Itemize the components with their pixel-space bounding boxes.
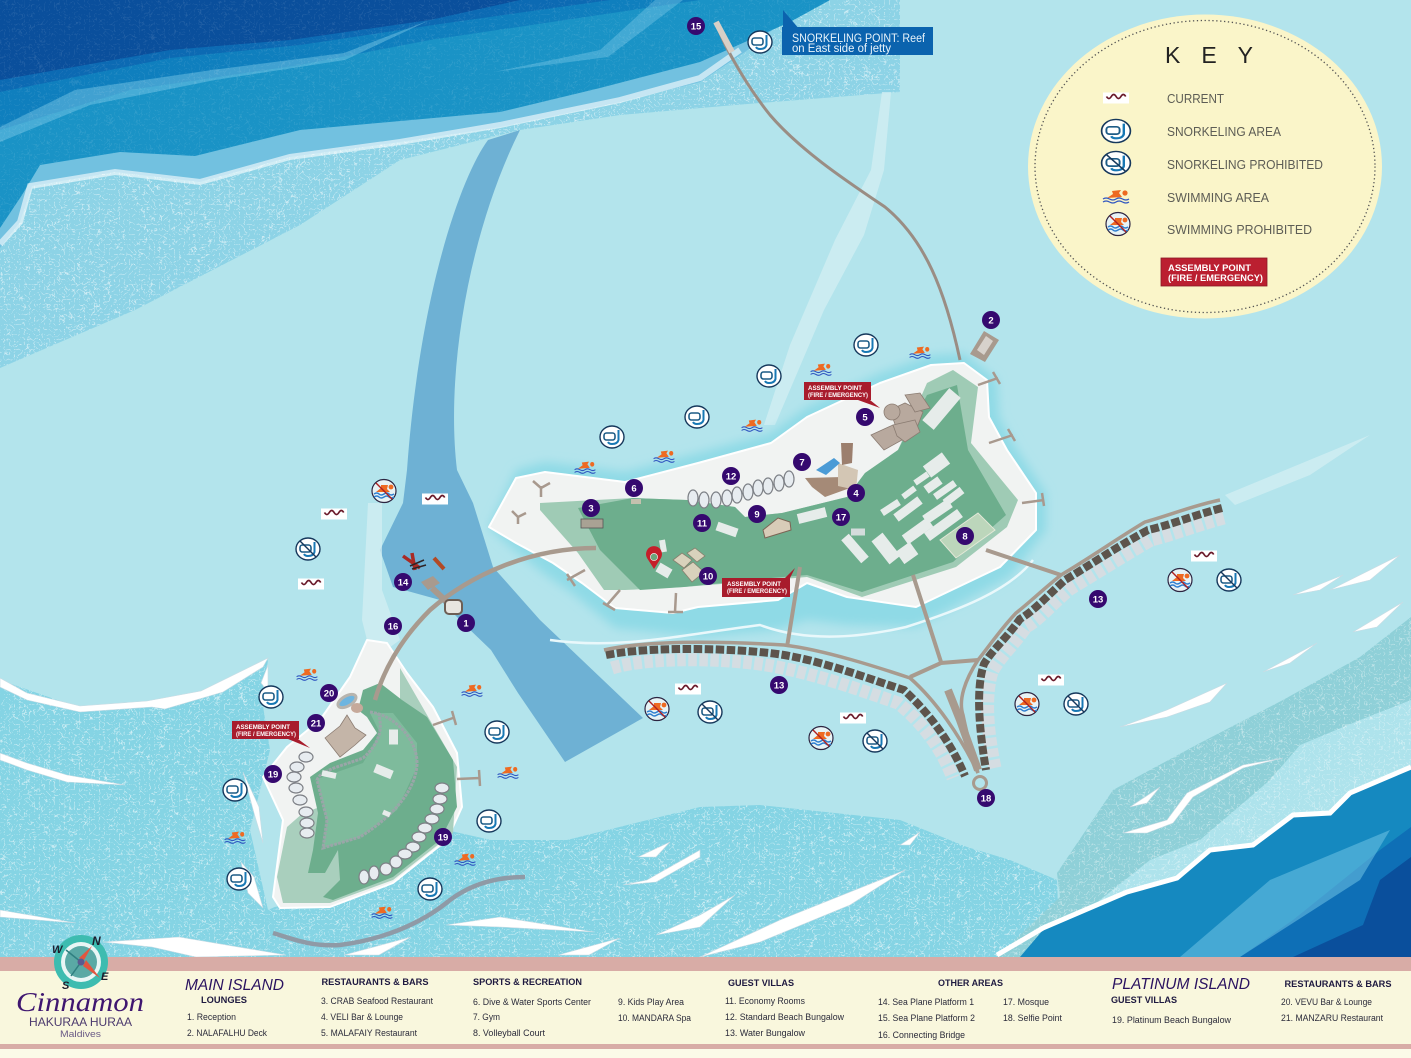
key: snorkeling prohibited: SNORKELING PROHIBITED: [1167, 157, 1323, 172]
numbered markers: [264, 17, 1107, 846]
walkways: [604, 500, 1220, 773]
garden pathway: [317, 712, 417, 848]
shallow halo around main island: [489, 353, 1046, 637]
logo: HAKURAA HURAA: [29, 1015, 132, 1029]
reef: north-west shallows: [0, 0, 900, 368]
column: guest villas: GUEST VILLAS: [728, 978, 794, 989]
key: swimming prohibited: SWIMMING PROHIBITED: [1167, 222, 1312, 237]
compass: E: [101, 971, 109, 983]
pale sand bars: [362, 92, 1370, 660]
reef: south-east shallows: [997, 617, 1411, 957]
column: other areas: 17. Mosque: [1003, 997, 1049, 1007]
column: platinum island: 19. Platinum Beach Bungalow: [1112, 1015, 1231, 1025]
water bungalows and walkways: [604, 500, 1224, 790]
numbered markers: 15: [691, 22, 702, 32]
assembly point: north: [804, 382, 880, 408]
key: current: CURRENT: [1167, 91, 1224, 106]
assembly point: south: (FIRE / EMERGENCY): [727, 588, 787, 595]
restaurant 5 buildings: [871, 393, 930, 450]
column: platinum island: [1111, 976, 1250, 1025]
platinum bungalows: [287, 752, 449, 884]
key: assembly point: [1161, 258, 1267, 286]
numbered markers: 3: [588, 504, 594, 514]
gym building: [763, 518, 791, 538]
long jetty to seaplane platform 2: [716, 22, 960, 360]
small jetties on main island: [512, 372, 1044, 612]
west island sand: [263, 640, 462, 908]
numbered markers: 10: [703, 572, 713, 582]
column: guest villas: 13. Water Bungalow: [725, 1028, 805, 1038]
numbered markers: 8: [962, 532, 968, 542]
column: guest villas: [725, 978, 844, 1038]
selfie point ring: [974, 776, 986, 790]
west island blocks: [322, 737, 398, 815]
west island inner garden: [317, 713, 417, 848]
column: other areas: 18. Selfie Point: [1003, 1013, 1062, 1023]
numbered markers: 13: [1093, 594, 1103, 606]
column: sports and recreation: 9. Kids Play Area: [618, 997, 684, 1007]
snorkeling point callout: SNORKELING POINT: Reef: [792, 33, 926, 45]
column: sports and recreation: SPORTS & RECREATION: [473, 977, 582, 988]
column: main island lounges: 1. Reception: [187, 1012, 236, 1022]
key: assembly point: (FIRE / EMERGENCY): [1168, 273, 1263, 284]
key: snorkeling area: [1102, 119, 1281, 143]
restaurant 4 and 7 buildings: [805, 443, 858, 497]
assembly point: west island: (FIRE / EMERGENCY): [236, 731, 296, 738]
numbered markers: 1: [463, 618, 469, 630]
numbered markers: 19: [438, 832, 448, 844]
numbered markers: 14: [398, 578, 409, 588]
snorkeling prohibited icons: [296, 538, 1241, 752]
assembly point: north: ASSEMBLY POINT: [808, 385, 862, 392]
column: main island lounges: LOUNGES: [201, 995, 247, 1006]
numbered markers: 18: [981, 794, 991, 804]
main island: [489, 363, 1036, 613]
spa buildings: [673, 548, 705, 582]
white wave crests: [0, 555, 1403, 957]
west island pale vegetation: [277, 668, 457, 903]
assembly point: west island: [232, 721, 310, 748]
main island dark vegetation: [578, 385, 1006, 592]
key: assembly point: ASSEMBLY POINT: [1168, 263, 1251, 274]
numbered markers: 12: [726, 472, 736, 482]
compass: S: [62, 980, 70, 992]
main island sand: [489, 363, 1036, 613]
column: guest villas: 11. Economy Rooms: [725, 996, 805, 1006]
numbered markers: 20: [324, 688, 334, 700]
column: restaurants and bars: 3. CRAB Seafood Restaurant: [321, 996, 433, 1006]
nalafalhu deck: [970, 331, 999, 362]
column: other areas: OTHER AREAS: [938, 978, 1003, 989]
deep water: south-east: [997, 767, 1411, 957]
numbered markers: 19: [268, 770, 278, 780]
footer legend panel: [0, 957, 1411, 1058]
deep water: north-west: [0, 0, 830, 248]
snorkeling point callout: [782, 10, 933, 55]
compass: N: [92, 934, 101, 948]
breakwater: [273, 877, 525, 945]
reception and seaplane platform: [421, 576, 462, 614]
key: swimming area: SWIMMING AREA: [1167, 190, 1269, 205]
numbered markers: 4: [853, 488, 859, 500]
assembly point: south: [722, 568, 795, 597]
key: swimming area: [1103, 190, 1269, 205]
key: current: [1103, 91, 1224, 106]
column: restaurants and bars: RESTAURANTS & BARS: [322, 977, 428, 988]
numbered markers: 21: [311, 718, 322, 730]
staff and villa blocks: [658, 393, 962, 574]
column: main island lounges: MAIN ISLAND: [185, 977, 284, 994]
logo: Maldives: [60, 1029, 101, 1040]
manzaru restaurant: [325, 692, 366, 757]
numbered markers: 13: [774, 680, 784, 692]
column: other areas: 14. Sea Plane Platform 1: [878, 997, 974, 1007]
map pin: [646, 546, 662, 569]
reef: south shallows: [0, 660, 1060, 957]
column: other areas: 16. Connecting Bridge: [878, 1030, 965, 1040]
numbered markers: 9: [754, 510, 760, 520]
column: platinum restaurants and bars: 21. MANZARU Restaurant: [1281, 1013, 1383, 1023]
lagoon wave line: [550, 560, 1033, 643]
numbered markers: 5: [862, 412, 868, 424]
column: platinum restaurants and bars: RESTAURANTS & BARS: [1284, 979, 1392, 990]
column: main island lounges: 2. NALAFALHU Deck: [187, 1028, 267, 1038]
column: restaurants and bars: 5. MALAFAIY Restaurant: [321, 1028, 417, 1038]
column: platinum island: PLATINUM ISLAND: [1112, 976, 1250, 993]
swimming icons: [225, 347, 930, 918]
column: restaurants and bars: 4. VELI Bar & Lounge: [321, 1012, 403, 1022]
numbered markers: 7: [799, 458, 805, 468]
bungalow rows: south arc: [606, 649, 965, 778]
seaplane and boat: [403, 553, 444, 570]
compass: [52, 934, 109, 992]
snorkeling point callout: on East side of jetty: [792, 43, 891, 55]
column: sports and recreation: [473, 977, 691, 1038]
compass: W: [52, 944, 64, 956]
numbered markers: 16: [388, 622, 398, 632]
column: platinum restaurants and bars: 20. VEVU Bar & Lounge: [1281, 997, 1372, 1007]
current icons: [298, 494, 1217, 724]
column: sports and recreation: 7. Gym: [473, 1012, 500, 1022]
column: platinum island: GUEST VILLAS: [1111, 995, 1177, 1006]
numbered markers: 2: [988, 316, 994, 326]
bungalow rows: east arc: [979, 508, 1224, 770]
west island: [263, 640, 480, 908]
column: other areas: [878, 978, 1062, 1040]
west island small jetties: [433, 711, 480, 786]
assembly point: north: (FIRE / EMERGENCY): [808, 392, 868, 399]
key title: KEY: [1165, 42, 1253, 68]
column: sports and recreation: 8. Volleyball Court: [473, 1028, 545, 1038]
column: guest villas: 12. Standard Beach Bungalow: [725, 1012, 844, 1022]
logo: [16, 987, 144, 1040]
column: other areas: 15. Sea Plane Platform 2: [878, 1013, 975, 1023]
numbered markers: 6: [631, 484, 637, 494]
key: snorkeling prohibited: [1102, 151, 1323, 175]
connecting bridge: [375, 548, 596, 700]
key: swimming prohibited: [1106, 212, 1312, 237]
beach bungalows row: [688, 471, 794, 508]
crab restaurant: [581, 519, 603, 528]
column: platinum restaurants and bars: [1281, 979, 1392, 1023]
snorkeling icons: [223, 31, 878, 900]
numbered markers: 11: [697, 518, 708, 530]
logo: Cinnamon: [16, 987, 144, 1017]
main island pale vegetation: [540, 370, 1018, 597]
key: snorkeling area: SNORKELING AREA: [1167, 124, 1281, 139]
swimming prohibited icons: [372, 480, 1192, 750]
column: sports and recreation: 6. Dive & Water Sports Center: [473, 997, 591, 1007]
column: main island lounges: [185, 977, 284, 1038]
deep channel: [380, 130, 643, 762]
key panel: [1028, 14, 1382, 318]
dive center: [631, 499, 641, 504]
assembly point: west island: ASSEMBLY POINT: [236, 724, 290, 731]
assembly point: south: ASSEMBLY POINT: [727, 581, 781, 588]
west island dark vegetation: [308, 683, 457, 900]
column: restaurants and bars: [321, 977, 433, 1038]
column: sports and recreation: 10. MANDARA Spa: [618, 1013, 691, 1023]
numbered markers: 17: [836, 512, 846, 524]
sports field: [940, 513, 995, 558]
